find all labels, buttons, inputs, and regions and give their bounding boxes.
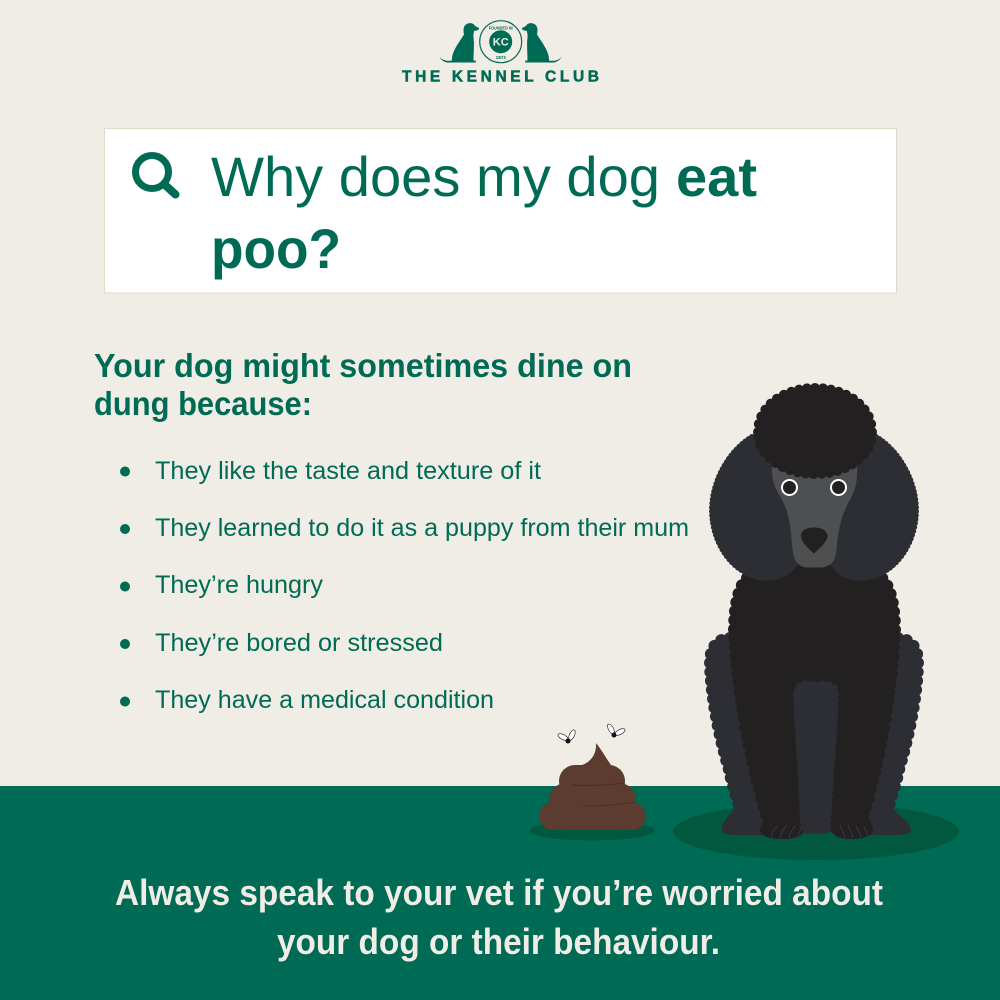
illustration: poo with flies (530, 723, 655, 840)
chest tuft between legs (797, 685, 835, 830)
badge: founded in 1873: KC (493, 37, 509, 49)
footer message (115, 872, 883, 962)
back legs (710, 638, 918, 830)
bullet list: reasons: They learned to do it as a puppy from their mum (155, 514, 689, 542)
left ear (712, 437, 800, 578)
badge: founded in 1873 (480, 21, 522, 63)
panel: search box (104, 128, 896, 293)
heading: search question (211, 145, 757, 280)
poo shadow (530, 820, 655, 840)
icon: fly left (557, 729, 577, 744)
topknot (758, 388, 872, 474)
icon: magnifying glass (136, 156, 176, 194)
panel: green footer band (0, 786, 1000, 1000)
icon: fly right (606, 723, 626, 738)
illustration: black poodle (673, 388, 959, 860)
front paws (760, 810, 873, 839)
face (772, 465, 857, 568)
footer message: your dog or their behaviour. (277, 921, 720, 962)
bullet list: reasons (120, 457, 689, 714)
hind feet (722, 805, 911, 835)
heading: search question: eat (676, 145, 757, 208)
footer message: Always speak to your vet if you’re worried about (115, 872, 883, 913)
dog shadow (673, 803, 959, 860)
badge: founded in 1873: 1873 (496, 55, 506, 60)
bullet list: reasons: They’re hungry (155, 571, 324, 599)
poo pile (539, 743, 646, 830)
icon: right seated dog (522, 23, 562, 63)
subheading (94, 347, 632, 422)
icon: left seated dog (440, 23, 479, 63)
subheading: Your dog might sometimes dine on (94, 347, 632, 384)
heading: search question: poo? (211, 217, 341, 280)
right eye (831, 480, 846, 495)
body and front legs (734, 555, 895, 815)
logo wordmark: THE KENNEL CLUB (402, 68, 599, 86)
bullet list: reasons: They’re bored or stressed (155, 629, 443, 657)
heading: search question: Why does my dog (211, 145, 660, 208)
left eye (782, 480, 797, 495)
bullet list: reasons: They have a medical condition (155, 686, 494, 714)
badge: founded in 1873: FOUNDED IN (489, 26, 513, 30)
logo: The Kennel Club (402, 21, 599, 86)
bullet list: reasons: They like the taste and texture of it (155, 457, 541, 485)
subheading: dung because: (94, 385, 312, 422)
right ear (828, 437, 916, 578)
nose (801, 528, 828, 554)
